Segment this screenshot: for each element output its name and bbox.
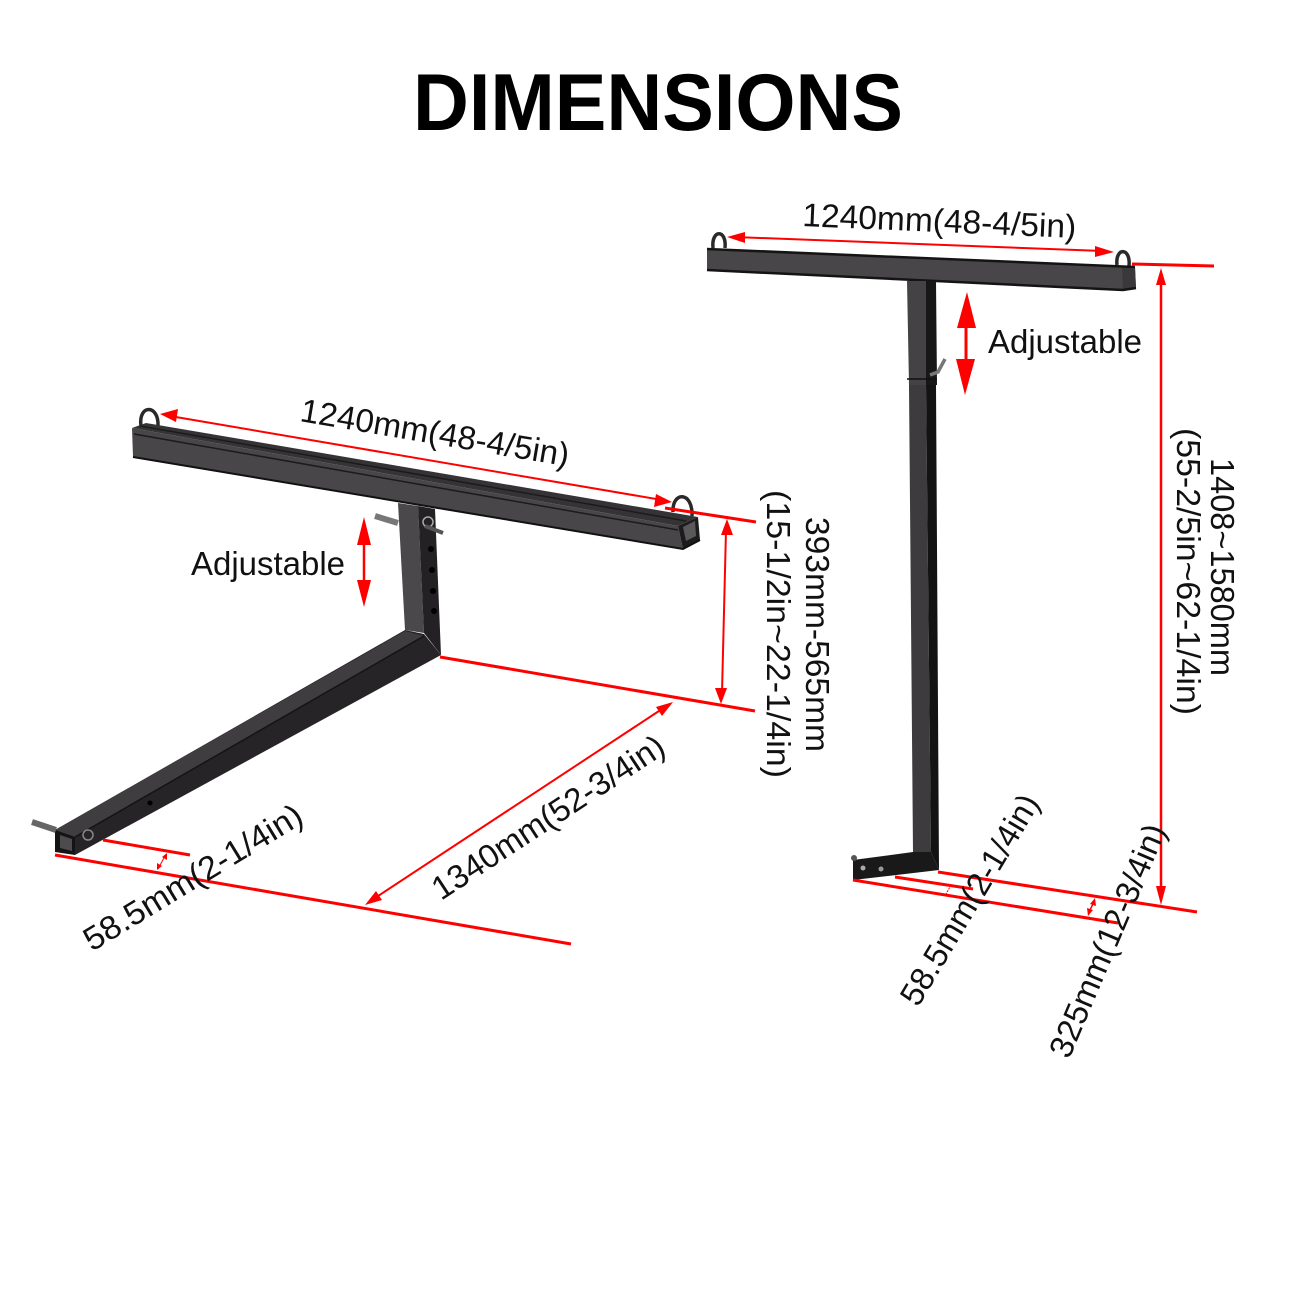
left adjustable arrow (357, 517, 371, 607)
label: right height mm: 1408~1580mm (1204, 458, 1241, 676)
label: left bar length: 1240mm(48-4/5in) (298, 391, 572, 473)
label: right offset: 325mm(12-3/4in) (1041, 818, 1173, 1063)
left tube width arrow (157, 853, 167, 870)
right crossbar (707, 249, 1136, 290)
label: right tube width: 58.5mm(2-1/4in) (892, 787, 1046, 1012)
label: left height inches: (15-1/2in~22-1/4in) (760, 490, 797, 778)
left bar length arrow (160, 409, 672, 507)
right adjustable arrow (956, 292, 976, 395)
label: right bar length: 1240mm(48-4/5in) (802, 196, 1077, 245)
dimension lines left (55, 409, 756, 944)
title: DIMENSIONS (413, 58, 903, 148)
right upper post (907, 281, 937, 385)
right tube width arrow (946, 885, 951, 894)
icon: left rack ring left (141, 410, 158, 426)
dimension lines right (727, 232, 1214, 923)
label: left adjustable: Adjustable (191, 545, 345, 582)
left height arrow (715, 519, 733, 704)
right wing bolt (930, 359, 945, 375)
left adjustable post (398, 503, 443, 655)
label: left tube width: 58.5mm(2-1/4in) (76, 796, 309, 958)
right height arrow (1156, 268, 1166, 905)
left rack assembly (32, 410, 700, 855)
label: right height inches: (55-2/5in~62-1/4in) (1170, 428, 1207, 715)
left crossbar (132, 423, 700, 549)
right bar length arrow (727, 232, 1114, 257)
icon: right rack ring right (1117, 252, 1129, 266)
right foot (851, 852, 939, 880)
icon: right rack ring left (713, 234, 725, 248)
icon: left rack ring right (673, 497, 692, 516)
left locking pin (375, 516, 398, 523)
left extension lines (55, 508, 756, 944)
left arm length arrow (365, 702, 673, 905)
left end pin (32, 822, 56, 830)
label: left height mm: 393mm-565mm (799, 517, 836, 752)
label: left arm length: 1340mm(52-3/4in) (425, 727, 671, 907)
label: right adjustable: Adjustable (988, 323, 1142, 360)
right offset arrow (1087, 898, 1096, 916)
right extension lines (853, 264, 1214, 923)
right rack assembly (707, 234, 1136, 880)
right lower post (909, 385, 939, 870)
left arm (55, 630, 441, 855)
